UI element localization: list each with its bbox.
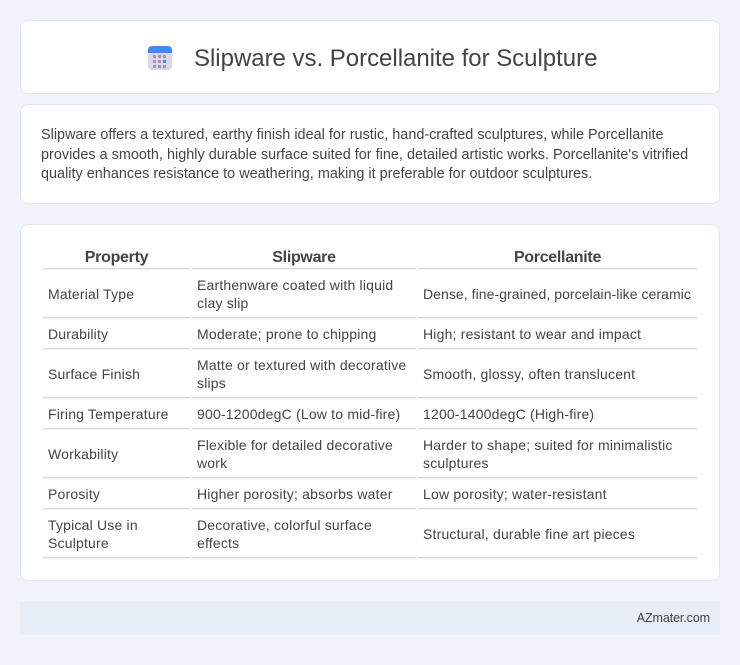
column heading: Property: Property (85, 249, 148, 266)
row: Workability (48, 437, 673, 471)
comparison table: 1200-1400degC (High-fire) (423, 406, 594, 422)
title: Slipware vs. Porcellanite for Sculpture (194, 45, 597, 72)
comparison table: Matte or textured with decorative (197, 357, 406, 373)
comparison table: Sculpture (48, 535, 109, 551)
comparison table: sculptures (423, 455, 489, 471)
comparison table: Flexible for detailed decorative (197, 437, 393, 453)
comparison table: Harder to shape; suited for minimalistic (423, 437, 673, 453)
comparison table: Moderate; prone to chipping (197, 326, 376, 342)
summary text (41, 127, 688, 182)
comparison table: 900-1200degC (Low to mid-fire) (197, 406, 400, 422)
comparison table: Porosity (48, 486, 100, 502)
comparison table: High; resistant to wear and impact (423, 326, 641, 342)
footer credit: AZmater.com (637, 611, 710, 625)
summary text: quality enhances resistance to weathering, making it preferable for outdoor sculptures. (41, 166, 592, 182)
row: Firing Temperature (48, 406, 594, 422)
comparison table: Material Type (48, 286, 134, 302)
footer bar (20, 601, 720, 635)
comparison table: Surface Finish (48, 366, 140, 382)
column heading: Slipware: Slipware (272, 249, 336, 266)
comparison table: effects (197, 535, 239, 551)
comparison table: slips (197, 375, 226, 391)
summary text: Slipware offers a textured, earthy finish ideal for rustic, hand-crafted sculptures, while Porcellanite (41, 127, 664, 143)
comparison table panel (20, 224, 720, 581)
comparison table: Workability (48, 446, 118, 462)
comparison table: clay slip (197, 295, 249, 311)
summary text: provides a smooth, highly durable surface suited for fine, detailed artistic works. Porcellanite's vitrified (41, 146, 688, 162)
summary panel (20, 104, 720, 204)
comparison table: Typical Use in (48, 517, 138, 533)
row: Surface Finish (48, 357, 635, 391)
header panel (20, 20, 720, 94)
row: Material Type (48, 277, 691, 311)
row: Durability (48, 326, 641, 342)
comparison table: Dense, fine-grained, porcelain-like ceramic (423, 286, 691, 302)
comparison table: Smooth, glossy, often translucent (423, 366, 635, 382)
comparison table: Higher porosity; absorbs water (197, 486, 393, 502)
row: Typical Use in Sculpture (48, 517, 635, 551)
comparison table: Structural, durable fine art pieces (423, 526, 635, 542)
comparison table: Low porosity; water-resistant (423, 486, 607, 502)
comparison table: Earthenware coated with liquid (197, 277, 393, 293)
icon: calendar (148, 46, 172, 70)
comparison table: Durability (48, 326, 108, 342)
row: Porosity (48, 486, 607, 502)
comparison table: Decorative, colorful surface (197, 517, 372, 533)
comparison table: work (197, 455, 227, 471)
comparison table: Firing Temperature (48, 406, 169, 422)
column heading: Porcellanite: Porcellanite (514, 249, 601, 266)
